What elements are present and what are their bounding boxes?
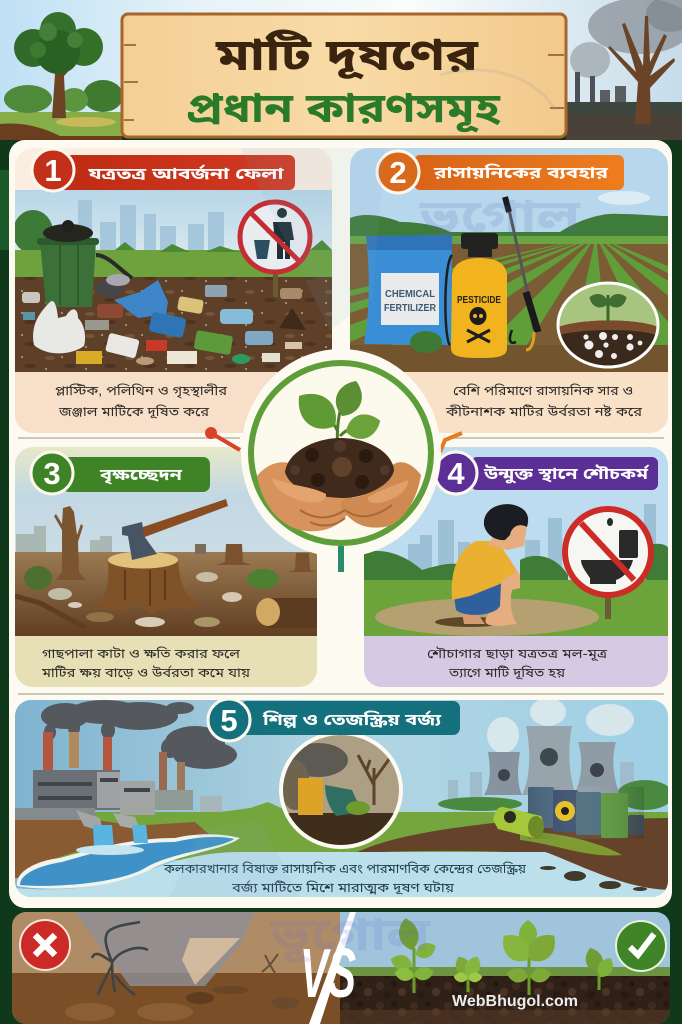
badge 5 heading: শিল্প ও তেজস্ক্রিয় বর্জ্য [262, 710, 442, 730]
smoke plumes [41, 700, 237, 769]
badge 5 [208, 699, 460, 741]
badge 1: 1 [44, 153, 62, 188]
sprout [289, 376, 384, 450]
distant buildings [448, 762, 634, 800]
caption 1 text: জঞ্জাল মাটিকে দূষিত করে [58, 404, 209, 419]
panel 2: chemicals [350, 148, 668, 433]
teal stem below medallion [338, 546, 344, 572]
badge 4 [435, 452, 658, 494]
panel 5: industrial and radioactive waste [15, 698, 673, 897]
large tree stump [92, 552, 202, 614]
blue plastic bag [114, 280, 168, 318]
caption 5 text [163, 861, 527, 895]
dark hose and bags behind bin [96, 255, 132, 297]
badge 1 [32, 149, 295, 191]
small weed [410, 331, 442, 353]
faint panel dividers [18, 438, 664, 694]
caption 2 text [445, 383, 642, 419]
healthy side [340, 912, 670, 1024]
translucent watermark: ভূগোল [269, 908, 431, 964]
debris [15, 572, 317, 628]
badge 2 [377, 151, 624, 193]
cross icon [20, 920, 70, 970]
caption 1 background [15, 372, 278, 433]
green slime spill [520, 832, 622, 855]
soil mound [285, 438, 394, 498]
dead trunk [54, 506, 86, 580]
left healthy tree [4, 12, 123, 127]
fertilizer bag: CHEMICAL [385, 289, 435, 300]
badge 2 heading: রাসায়নিকের ব্যবহার [433, 164, 608, 182]
caption 4 text [427, 646, 607, 680]
factory left [33, 732, 222, 815]
title line 2: প্রধান কারণসমূহ [186, 85, 501, 133]
translucent watermark: ভূগোল [419, 190, 581, 246]
caption 2 text: কীটনাশক মাটির উর্বরতা নষ্ট করে [445, 404, 642, 419]
no-littering sign [240, 202, 310, 297]
caption 4 text: ত্যাগে মাটি দূষিত হয় [448, 665, 566, 680]
cooling towers [484, 726, 620, 795]
right contaminated soil [355, 818, 668, 890]
scattered litter [22, 285, 306, 365]
connector arrows to centre [205, 427, 462, 452]
sprayer hose [445, 255, 452, 345]
pesticide bottle: PESTICIDE [457, 295, 501, 306]
cooling steam [487, 698, 634, 753]
caption 3 background [15, 636, 317, 687]
badge 4 heading: উন্মুক্ত স্থানে শৌচকর্ম [483, 464, 650, 485]
caption 2 background [404, 372, 668, 433]
caption 5 text: কলকারখানার বিষাক্ত রাসায়নিক এবং পারমাণবিক কেন্দ্রের তেজস্ক্রিয় [163, 861, 527, 876]
badge 4: 4 [447, 456, 465, 491]
panel 1: littering [13, 148, 332, 433]
badge 2: 2 [389, 155, 407, 190]
bottom comparison strip [12, 912, 670, 1024]
trash bin [37, 220, 99, 307]
sprayer wand [505, 197, 538, 350]
website label: WebBhugol.com [452, 993, 578, 1010]
caption 3 text [41, 646, 251, 680]
caption 4 text: শৌচাগার ছাড়া যত্রতত্র মল-মূত্র [427, 646, 607, 662]
white slash divider [309, 912, 356, 1024]
small stumps [195, 544, 316, 572]
waste barrels [493, 787, 644, 839]
badge 1 heading: যত্রতত্র আবর্জনা ফেলা [87, 164, 284, 183]
axe [122, 499, 228, 560]
caption 3 text: মাটির ক্ষয় বাড়ে ও উর্বরতা কমে যায় [41, 665, 251, 680]
caption 2 text: বেশি পরিমাণে রাসায়নিক সার ও [453, 383, 633, 398]
check icon [616, 921, 666, 971]
title wooden sign [122, 14, 566, 137]
fertilizer bag [364, 235, 452, 345]
right tree line [438, 780, 673, 811]
left eroded soil bank [15, 818, 210, 878]
inset soil ellipse [556, 283, 660, 372]
thumbs and finger lines [272, 478, 408, 525]
pool stones [540, 866, 647, 891]
badge 3 heading: বৃক্ষচ্ছেদন [99, 467, 183, 485]
caption 1 text: প্লাস্টিক, পলিথিন ও গৃহস্থালীর [55, 383, 227, 399]
white plastic bag [33, 301, 85, 353]
no-toilet sign [565, 509, 651, 619]
caption 3 text: গাছপালা কাটা ও ক্ষতি করার ফলে [42, 646, 241, 661]
panel 3: deforestation [15, 447, 317, 687]
boy [452, 504, 528, 626]
title line 1: মাটি দূষণের [215, 29, 479, 80]
main white panel [9, 140, 672, 908]
right dead tree and factories [566, 0, 682, 124]
pesticide bottle [451, 233, 507, 358]
drain pipes [15, 808, 138, 829]
degraded side [12, 912, 352, 1024]
caption pool [15, 852, 668, 897]
caption 1 text [55, 383, 227, 419]
badge 3 [31, 452, 210, 494]
caption 5 text: বর্জ্য মাটিতে মিশে মারাত্মক দূষণ ঘটায় [231, 880, 455, 895]
badge 3: 3 [43, 456, 61, 491]
translucent watermark [170, 70, 581, 964]
centre medallion [241, 349, 441, 557]
cupped hands [257, 462, 421, 531]
inset polluted scene [280, 733, 402, 849]
badge 5: 5 [220, 703, 238, 738]
polluted river [17, 825, 240, 889]
VS label: VS [300, 934, 356, 1012]
panel 4: open defecation [364, 447, 668, 687]
green weeds [24, 566, 279, 590]
caption 4 background [364, 636, 668, 687]
grass and hills [15, 802, 668, 860]
fertilizer bag: FERTILIZER [384, 303, 437, 314]
